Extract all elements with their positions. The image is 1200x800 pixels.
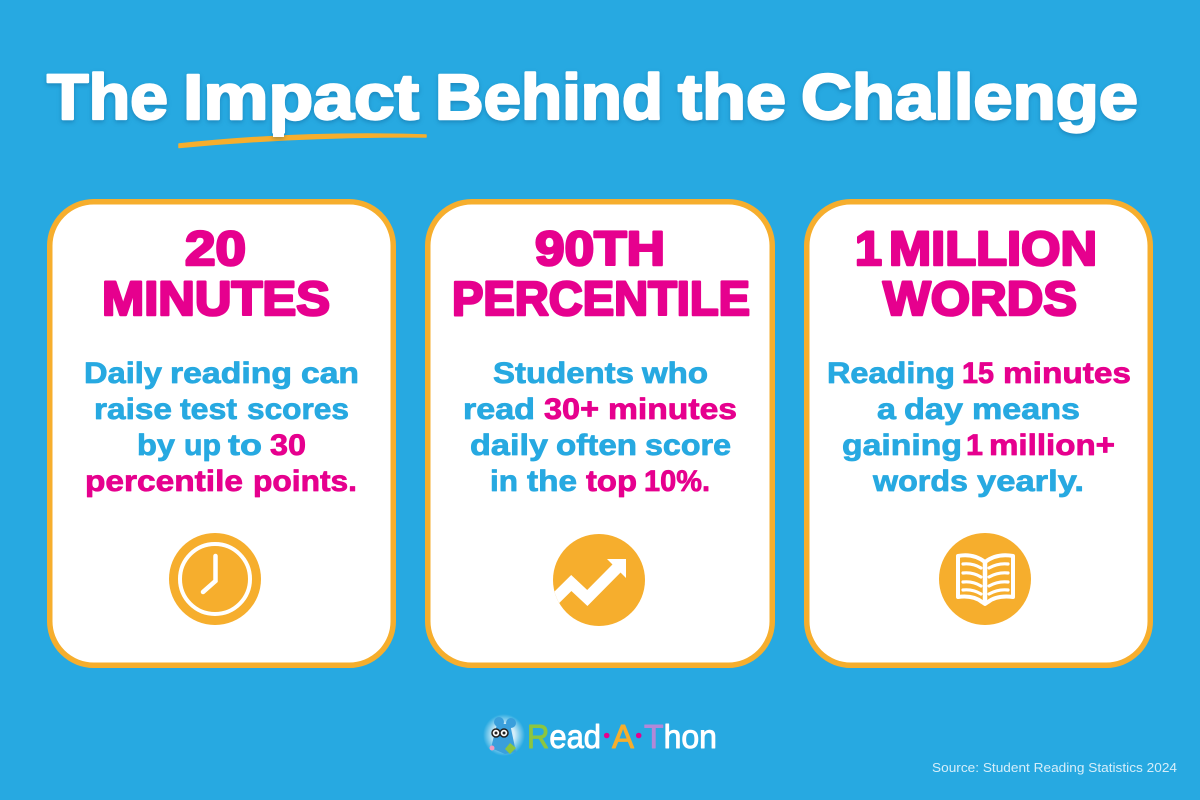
- source note: Source: Student Reading Statistics 2024: [932, 761, 1177, 775]
- text: test scores: can: [301, 357, 359, 390]
- text: test scores: raise: [94, 393, 172, 426]
- icon: clock: [169, 533, 261, 625]
- text: top 10%: 30+: [544, 393, 599, 426]
- text: vocabulary: words: [872, 465, 968, 498]
- title words: Behind: [435, 61, 663, 133]
- icon: mouse mascot: [483, 714, 525, 756]
- text: vocabulary: gaining: [842, 429, 962, 462]
- text: vocabulary: Reading: [827, 357, 955, 390]
- title: [47, 61, 1138, 148]
- heading: 90th percentile: 90TH: [535, 223, 665, 276]
- text: vocabulary: minutes: [1003, 357, 1131, 390]
- text: vocabulary: day: [904, 393, 963, 426]
- text: top 10%: Students: [493, 357, 634, 390]
- logo: Read-A-Thon: [483, 714, 717, 756]
- text: top 10%: daily: [470, 429, 548, 462]
- text: top 10%: read: [463, 393, 535, 426]
- text: top 10%: minutes: [608, 393, 737, 426]
- panel: 1 million words: [807, 202, 1150, 665]
- text: top 10%: [463, 357, 737, 498]
- icon: growth arrow: [546, 534, 645, 626]
- text: vocabulary: means: [972, 393, 1080, 426]
- text: test scores: by: [137, 429, 175, 462]
- title words: Challenge: [801, 61, 1138, 133]
- title underline: [179, 134, 426, 148]
- text: top 10%: in: [490, 465, 518, 498]
- text: vocabulary: 1: [966, 429, 983, 462]
- title words: The: [47, 61, 168, 133]
- text: vocabulary: yearly.: [977, 465, 1084, 498]
- text: test scores: points.: [253, 465, 357, 498]
- text: test scores: Daily: [84, 357, 162, 390]
- heading: 1 million words: WORDS: [883, 273, 1077, 326]
- text: test scores: test: [180, 393, 237, 426]
- text: top 10%: often: [556, 429, 637, 462]
- title words: [47, 61, 1138, 137]
- text: top 10%: top: [586, 465, 637, 498]
- wordmark: A: [612, 718, 634, 755]
- text: test scores: 30: [270, 429, 306, 462]
- text: vocabulary: [827, 357, 1131, 498]
- heading: 1 million words: MILLION: [889, 223, 1097, 276]
- text: vocabulary: 15: [962, 357, 994, 390]
- heading: 20 minutes: MINUTES: [102, 273, 330, 326]
- title words: Impact: [183, 61, 419, 133]
- heading: 20 minutes: 20: [185, 223, 246, 276]
- text: top 10%: 10%.: [644, 465, 710, 498]
- text: test scores: reading: [170, 357, 292, 390]
- text: test scores: scores: [247, 393, 349, 426]
- wordmark: Thon: [644, 718, 717, 755]
- icon: open book: [939, 533, 1031, 625]
- title words: the: [678, 61, 786, 133]
- text: top 10%: the: [527, 465, 577, 498]
- heading: 1 million words: [855, 223, 1097, 326]
- wordmark: [527, 718, 717, 755]
- text: vocabulary: million+: [989, 429, 1115, 462]
- heading: 1 million words: 1: [855, 223, 882, 276]
- text: vocabulary: a: [877, 393, 896, 426]
- panel: 20 minutes: [50, 202, 393, 665]
- text: test scores: [84, 357, 359, 498]
- heading: 90th percentile: [452, 223, 750, 326]
- heading: 20 minutes: [102, 223, 330, 326]
- wordmark: Read: [527, 718, 601, 755]
- text: top 10%: who: [641, 357, 708, 390]
- text: test scores: percentile: [85, 465, 243, 498]
- text: test scores: up: [184, 429, 221, 462]
- text: test scores: to: [228, 429, 262, 462]
- text: top 10%: score: [645, 429, 731, 462]
- heading: 90th percentile: PERCENTILE: [452, 273, 750, 326]
- panel: 90th percentile: [428, 202, 772, 665]
